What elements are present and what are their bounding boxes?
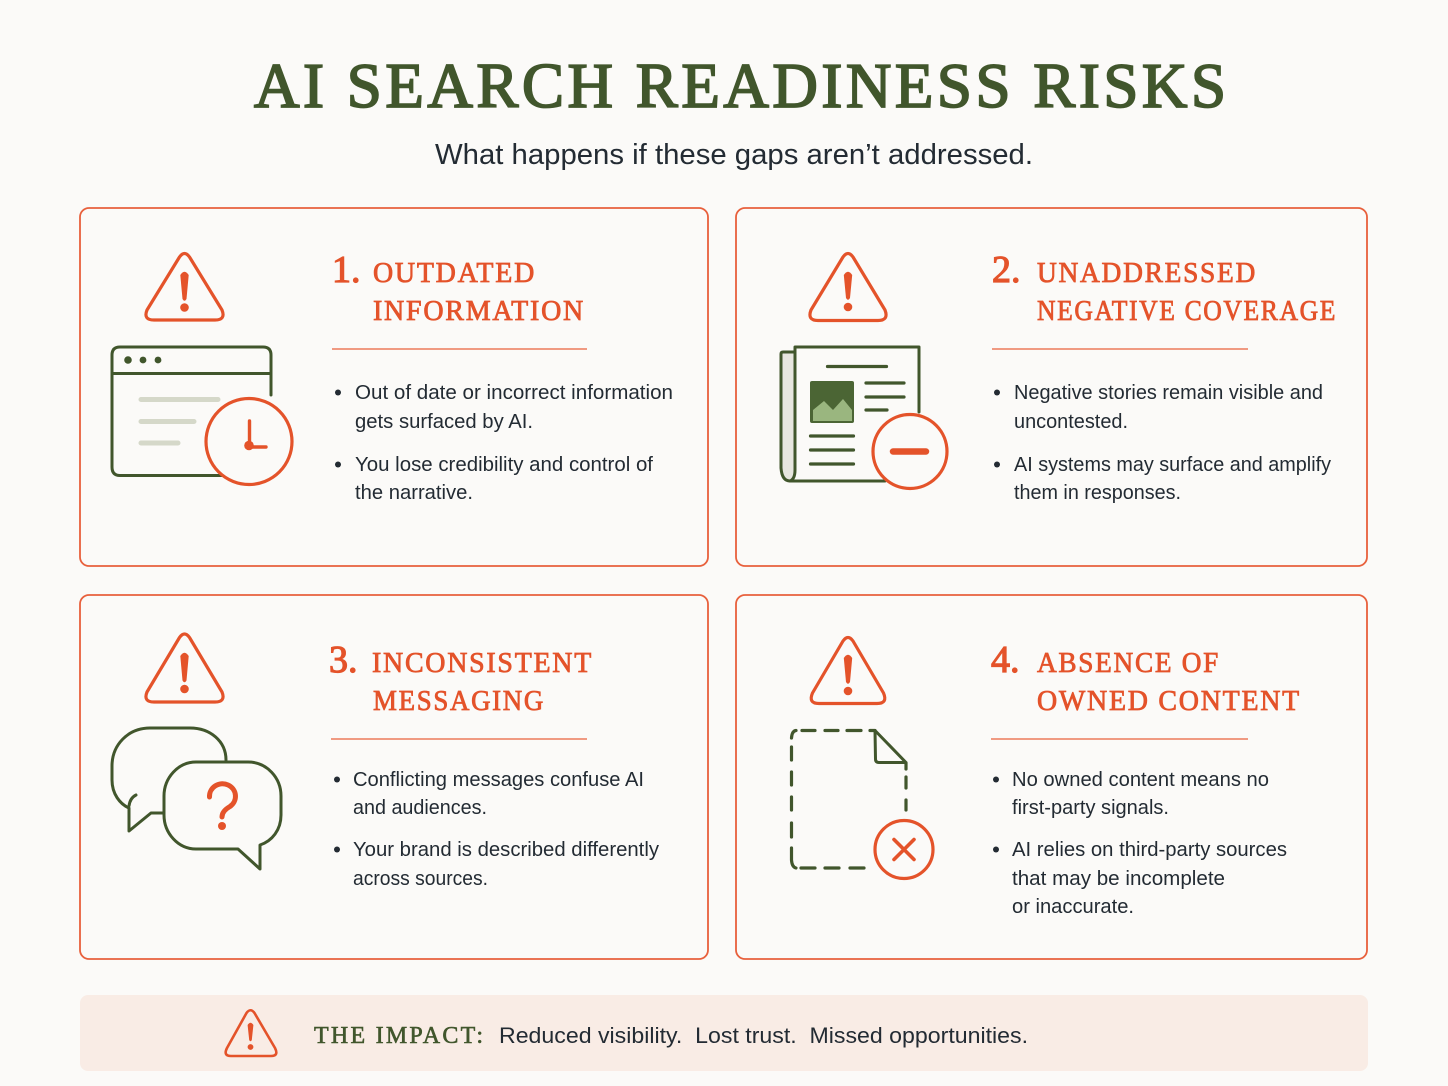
panel: absence of owned content bbox=[736, 595, 1367, 959]
icon: warning triangle bbox=[810, 254, 886, 320]
bullet list: 2: AI systems may surface and amplify bbox=[1014, 454, 1331, 476]
heading: 4: OWNED CONTENT bbox=[1037, 685, 1301, 717]
panel: unaddressed negative coverage bbox=[736, 208, 1367, 566]
icon: speech bubbles with question mark bbox=[112, 728, 281, 869]
bullet list: 4: AI relies on third-party sources bbox=[1012, 839, 1287, 861]
heading: 2: NEGATIVE COVERAGE bbox=[1037, 295, 1337, 327]
heading: 3: MESSAGING bbox=[373, 685, 545, 717]
icon: browser with clock bbox=[112, 347, 292, 484]
heading: 4 bbox=[991, 639, 1301, 717]
impact statement: Reduced visibility. Lost trust. Missed opportunities. bbox=[499, 1023, 1028, 1048]
heading: 4: 4. bbox=[991, 639, 1020, 681]
bullet list: 1 bbox=[335, 382, 673, 504]
panel: outdated information bbox=[80, 208, 708, 566]
bullet list: 3 bbox=[334, 769, 659, 890]
heading: 1: OUTDATED bbox=[373, 257, 536, 289]
heading: 2 bbox=[992, 249, 1337, 327]
impact label: THE IMPACT: bbox=[314, 1023, 483, 1049]
bullet list: 4: or inaccurate. bbox=[1012, 896, 1134, 918]
bullet list: 1: gets surfaced by AI. bbox=[355, 411, 533, 433]
callout: the impact bbox=[80, 995, 1368, 1071]
bullet list: 3: and audiences. bbox=[353, 797, 487, 819]
icon: warning triangle bbox=[226, 1010, 276, 1056]
bullet list: 1: You lose credibility and control of bbox=[355, 454, 653, 476]
bullet list: 1: Out of date or incorrect information bbox=[355, 382, 673, 404]
heading: 1: INFORMATION bbox=[373, 295, 585, 327]
bullet list: 4 bbox=[993, 769, 1287, 918]
heading: 1: 1. bbox=[332, 249, 360, 291]
heading: 3: INCONSISTENT bbox=[372, 647, 593, 679]
icon: warning triangle bbox=[811, 638, 885, 704]
icon: missing document with x bbox=[792, 730, 933, 878]
heading: 2: 2. bbox=[992, 249, 1020, 291]
icon: warning triangle bbox=[146, 254, 223, 320]
heading: 3: 3. bbox=[329, 639, 358, 681]
bullet list: 4: that may be incomplete bbox=[1012, 868, 1225, 890]
heading: 2: UNADDRESSED bbox=[1037, 257, 1257, 289]
bullet list: 3: Your brand is described differently bbox=[353, 839, 659, 861]
bullet list: 2: uncontested. bbox=[1014, 411, 1128, 433]
bullet list: 2 bbox=[994, 382, 1331, 504]
heading: 3 bbox=[329, 639, 593, 717]
bullet list: 2: Negative stories remain visible and bbox=[1014, 382, 1323, 404]
bullet list: 2: them in responses. bbox=[1014, 482, 1181, 504]
bullet list: 1: the narrative. bbox=[355, 482, 473, 504]
bullet list: 3: across sources. bbox=[353, 868, 488, 890]
icon: warning triangle bbox=[146, 634, 223, 702]
icon: newspaper with minus bbox=[781, 347, 947, 488]
subtitle: What happens if these gaps aren’t addressed. bbox=[435, 139, 1033, 171]
bullet list: 3: Conflicting messages confuse AI bbox=[353, 769, 644, 791]
bullet list: 4: No owned content means no bbox=[1012, 769, 1269, 791]
heading: 4: ABSENCE OF bbox=[1037, 647, 1220, 679]
bullet list: 4: first-party signals. bbox=[1012, 797, 1169, 819]
panel: inconsistent messaging bbox=[80, 595, 708, 959]
heading: 1 bbox=[332, 249, 585, 327]
title: AI SEARCH READINESS RISKS bbox=[254, 51, 1226, 121]
